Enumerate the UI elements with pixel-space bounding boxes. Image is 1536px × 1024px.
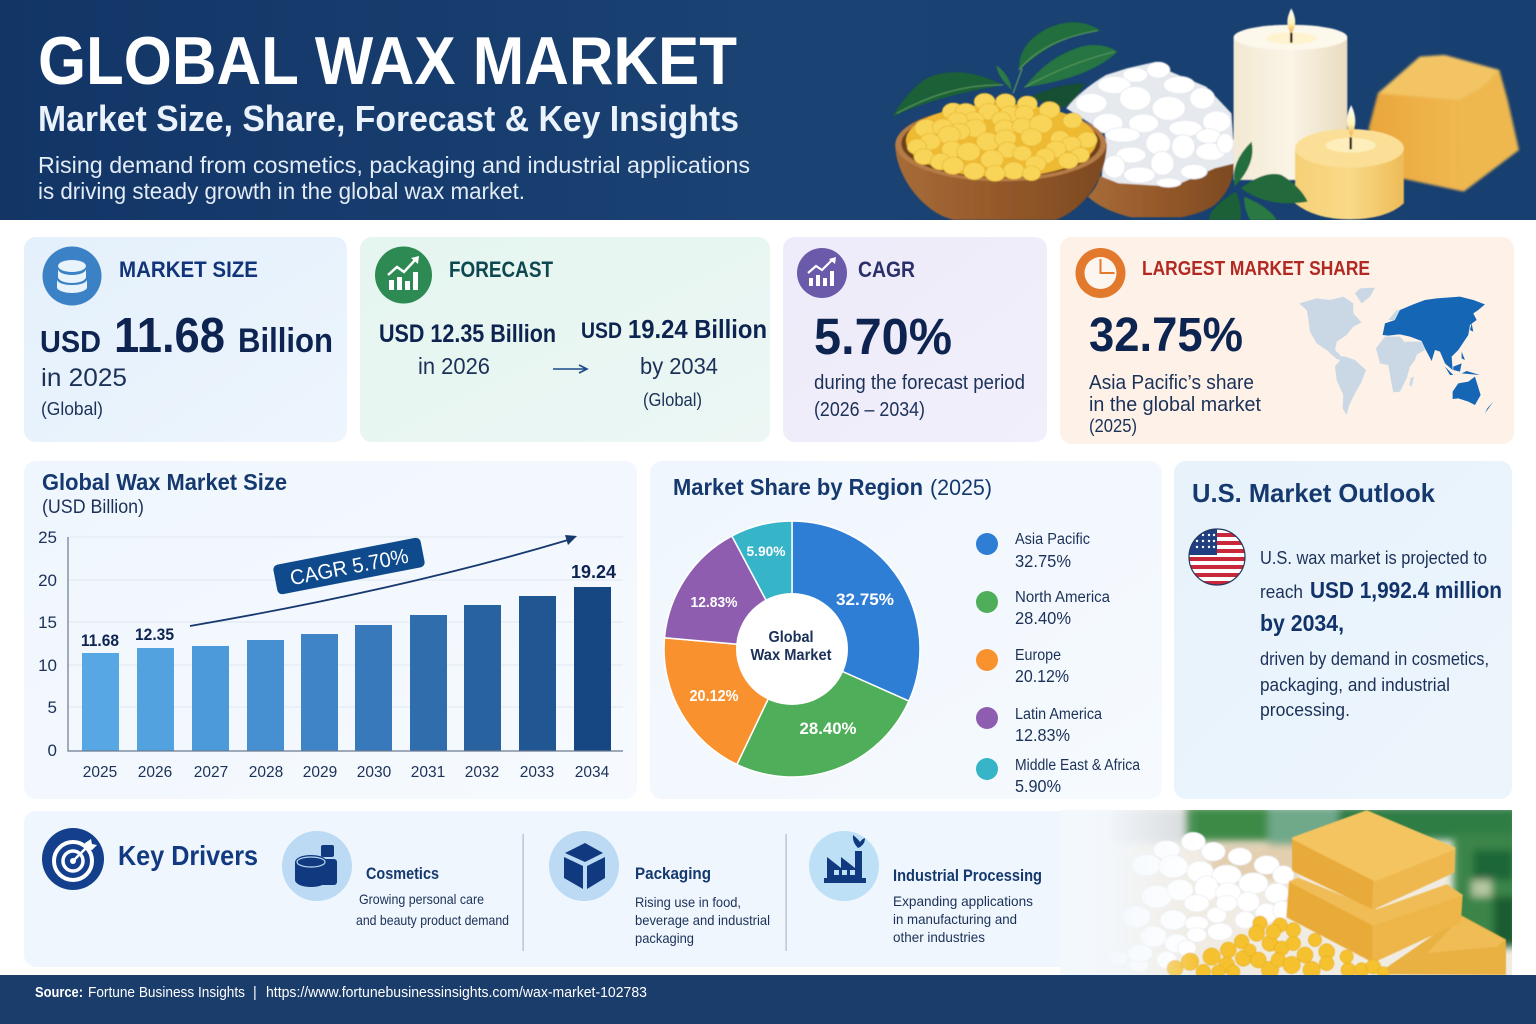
slice labels: 32.75% <box>836 590 894 609</box>
description <box>1089 372 1261 436</box>
driver: cosmetics: and beauty product demand <box>356 912 509 928</box>
description: (2026 – 2034) <box>814 399 925 421</box>
outlook text: packaging, and industrial <box>1260 675 1450 695</box>
value note <box>41 364 127 419</box>
x axis labels <box>83 764 610 781</box>
description: Asia Pacific’s share <box>1089 372 1254 394</box>
donut centre label: Global <box>768 629 814 646</box>
description <box>814 372 1025 421</box>
driver: industrial processing: Industrial Processing <box>893 866 1042 885</box>
value note: (Global) <box>41 399 103 419</box>
forecast 2026 <box>379 320 556 379</box>
chart heading: (USD Billion) <box>42 497 144 518</box>
y axis labels: 0 <box>48 741 57 760</box>
heading: FORECAST <box>449 257 553 282</box>
footer source bar: https://www.fortunebusinessinsights.com/wax-market-102783 <box>266 985 647 1001</box>
forecast 2034: by 2034 <box>640 353 718 379</box>
value: USD <box>40 324 101 359</box>
driver: industrial processing <box>809 831 1042 945</box>
legend: 28.40% <box>1015 608 1071 628</box>
heading: MARKET SIZE <box>119 257 258 282</box>
driver: industrial processing: other industries <box>893 929 985 945</box>
y axis labels: 10 <box>38 656 57 675</box>
y axis labels: 25 <box>38 528 57 547</box>
panel: key drivers <box>24 807 1520 979</box>
outlook text: driven by demand in cosmetics, <box>1260 649 1489 669</box>
forecast 2034: (Global) <box>643 390 702 410</box>
legend: 12.83% <box>1015 725 1070 745</box>
legend: North America <box>1015 589 1110 606</box>
icon: target <box>42 828 104 890</box>
value: Billion <box>238 322 333 360</box>
icon: pie <box>1076 248 1126 298</box>
heading: LARGEST MARKET SHARE <box>1142 258 1370 280</box>
legend: Europe <box>1015 647 1061 664</box>
pie heading: Market Share by Region <box>673 474 923 500</box>
driver: cosmetics <box>282 831 509 928</box>
header description: is driving steady growth in the global wax market. <box>38 178 525 204</box>
donut centre label: Wax Market <box>750 647 832 664</box>
legend: 32.75% <box>1015 551 1071 571</box>
card: market size <box>24 237 347 442</box>
x axis labels: 2028 <box>249 764 283 781</box>
outlook text <box>1260 548 1502 720</box>
outlook text: by 2034, <box>1260 610 1344 636</box>
slice labels: 12.83% <box>690 594 738 611</box>
forecast 2026: in 2026 <box>418 353 490 379</box>
footer source bar <box>0 975 1536 1024</box>
subtitle: Market Size, Share, Forecast & Key Insights <box>38 98 739 139</box>
outlook text: USD 1,992.4 million <box>1310 577 1502 603</box>
icon: trend chart <box>797 248 847 298</box>
card: CAGR <box>783 237 1047 442</box>
heading: U.S. Market Outlook <box>1192 478 1436 508</box>
description: in the global market <box>1089 394 1261 416</box>
header description <box>38 152 750 204</box>
driver: packaging: packaging <box>635 930 694 946</box>
driver: cosmetics: Growing personal care <box>359 891 484 907</box>
chart heading: Global Wax Market Size <box>42 469 287 495</box>
bars <box>82 587 611 751</box>
outlook text: U.S. wax market is projected to <box>1260 548 1487 568</box>
header description: Rising demand from cosmetics, packaging and industrial applications <box>38 152 750 178</box>
x axis labels: 2031 <box>411 764 445 781</box>
value <box>40 309 333 363</box>
legend: 5.90% <box>1015 776 1061 796</box>
pie heading: (2025) <box>930 475 992 500</box>
legend <box>976 531 1140 796</box>
arrow <box>553 365 587 373</box>
x axis labels: 2034 <box>575 764 610 781</box>
slice labels <box>690 543 894 738</box>
y axis labels: 5 <box>48 698 57 717</box>
driver: cosmetics: Cosmetics <box>366 865 439 883</box>
driver: industrial processing: Expanding applications <box>893 893 1033 909</box>
bar value labels: 19.24 <box>571 562 616 582</box>
footer source bar: | <box>253 985 257 1001</box>
heading: CAGR <box>858 257 915 282</box>
panel: market size bar chart <box>24 461 637 799</box>
card: largest market share <box>1060 237 1514 444</box>
world map <box>1299 288 1493 415</box>
legend: 20.12% <box>1015 666 1069 686</box>
x axis labels: 2026 <box>138 764 172 781</box>
legend: Middle East & Africa <box>1015 757 1140 774</box>
slice labels: 20.12% <box>690 688 738 705</box>
CAGR callout <box>273 537 425 595</box>
slice labels: 5.90% <box>746 543 786 559</box>
outlook text: processing. <box>1260 700 1350 720</box>
panel: market share by region <box>650 461 1162 799</box>
bar value labels: 12.35 <box>135 625 174 644</box>
slice labels: 28.40% <box>800 719 856 738</box>
value: 11.68 <box>114 309 225 363</box>
outlook text: reach <box>1260 582 1303 602</box>
description: (2025) <box>1089 416 1137 436</box>
driver: packaging: Rising use in food, <box>635 894 741 910</box>
x axis labels: 2032 <box>465 764 499 781</box>
icon: US flag <box>1189 529 1245 585</box>
description: during the forecast period <box>814 372 1025 394</box>
footer source bar: Fortune Business Insights <box>88 985 245 1001</box>
forecast 2034 <box>581 314 767 410</box>
x axis labels: 2029 <box>303 764 337 781</box>
donut chart <box>664 521 920 777</box>
header banner <box>0 0 1536 220</box>
icon: stacked wax discs <box>42 246 102 306</box>
driver: packaging <box>549 831 770 946</box>
footer source bar: Source: <box>35 985 83 1001</box>
driver: packaging: Packaging <box>635 864 711 883</box>
x axis labels: 2033 <box>520 764 554 781</box>
driver: industrial processing: in manufacturing and <box>893 911 1017 927</box>
panel: U.S. market outlook <box>1174 461 1512 799</box>
value: 32.75% <box>1089 309 1243 362</box>
arrow: growth trend <box>190 535 577 626</box>
forecast 2034: 19.24 Billion <box>628 314 767 344</box>
header photo: wax products and candles <box>893 8 1519 220</box>
y axis labels: 15 <box>38 613 57 632</box>
legend: Latin America <box>1015 706 1102 723</box>
legend: Asia Pacific <box>1015 531 1090 548</box>
heading: Key Drivers <box>118 840 258 871</box>
card: forecast <box>360 237 770 442</box>
y axis labels <box>38 528 57 760</box>
x axis labels: 2025 <box>83 764 117 781</box>
chart heading <box>42 469 287 518</box>
x axis labels: 2027 <box>194 764 228 781</box>
value note: in 2025 <box>41 364 127 392</box>
CAGR callout: CAGR 5.70% <box>288 545 410 590</box>
y axis labels: 20 <box>38 571 57 590</box>
forecast 2034: USD <box>581 318 622 343</box>
donut centre label <box>750 629 832 664</box>
title: GLOBAL WAX MARKET <box>38 23 737 99</box>
x axis labels: 2030 <box>357 764 392 781</box>
value: 5.70% <box>814 308 952 365</box>
driver: packaging: beverage and industrial <box>635 912 770 928</box>
icon: growth chart <box>375 246 432 304</box>
photo: wax bars, flakes and pellets <box>1060 807 1520 979</box>
bar value labels: 11.68 <box>81 631 119 650</box>
bar value labels <box>81 562 616 650</box>
forecast 2026: USD 12.35 Billion <box>379 320 556 348</box>
